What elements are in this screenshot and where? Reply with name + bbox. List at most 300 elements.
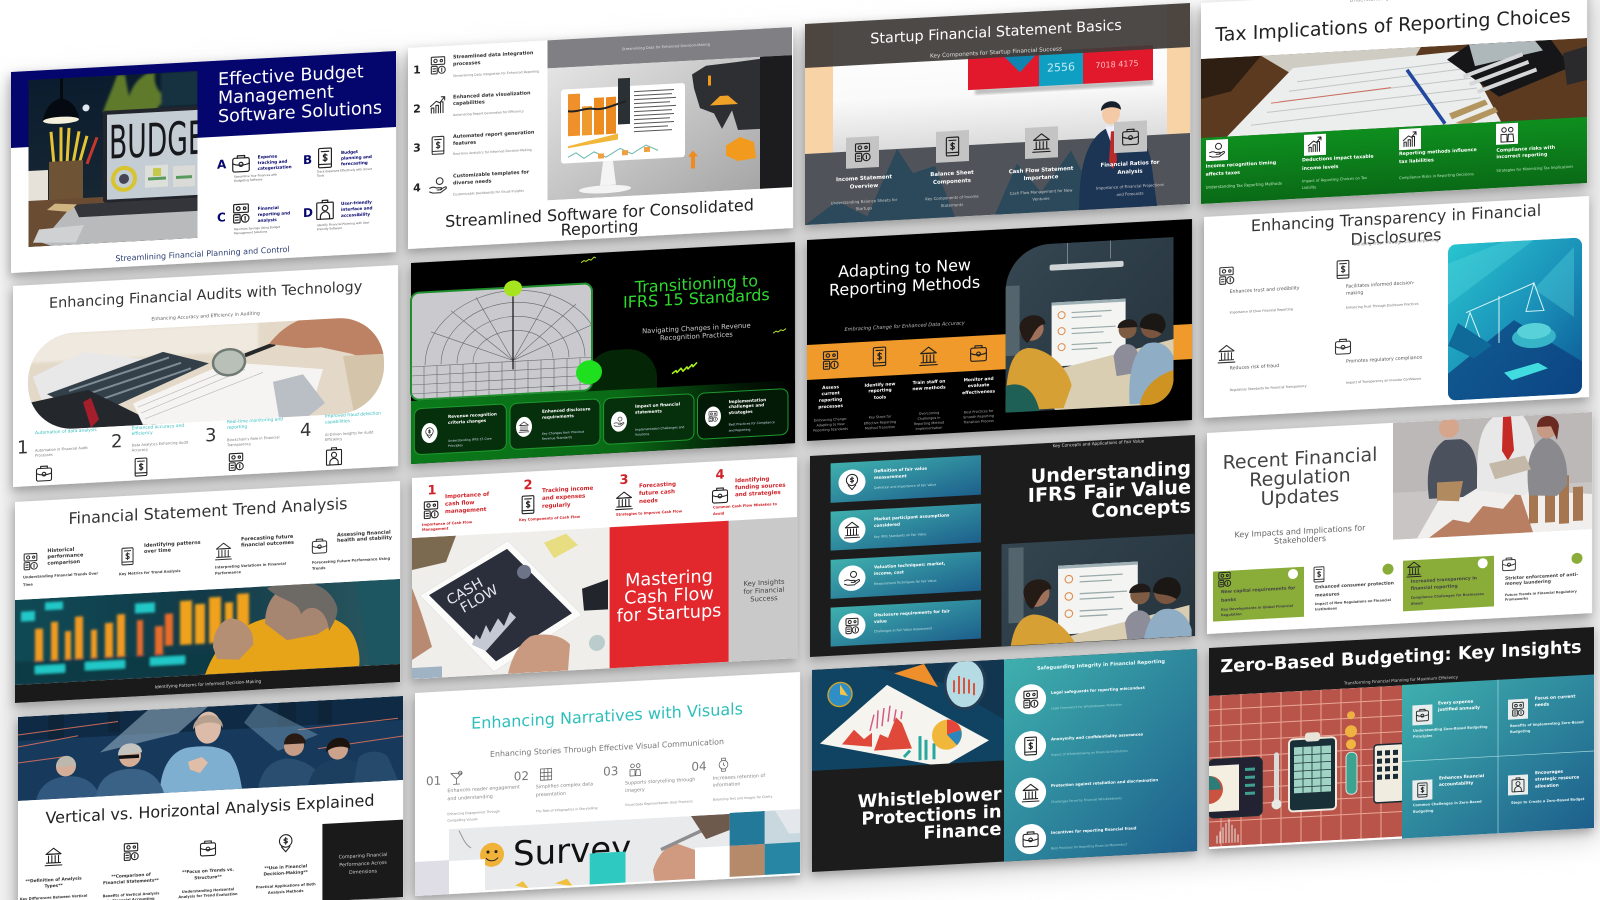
dark side panel: Comparing Financial — [339, 852, 387, 861]
green panel 4: Strategies for Minimizing Tax Implications — [1496, 165, 1573, 173]
red title panel: Mastering — [625, 567, 713, 591]
column 3: future cash — [639, 489, 675, 497]
card 4: Future Trends in Financial Regulatory — [1505, 589, 1578, 597]
box 4 — [698, 388, 788, 439]
title — [218, 61, 382, 127]
point 04: Increases retention of — [713, 773, 765, 782]
point 3: Reduces risk of fraud — [1230, 363, 1279, 372]
box 1: measurement — [874, 473, 907, 480]
column 4: Analysis Methods — [268, 889, 303, 895]
green panel 2: Liability — [1302, 185, 1317, 190]
column 2: Key Components of Cash Flow — [519, 515, 581, 522]
item A: expense tracking: Expense — [258, 153, 277, 160]
step 3: 3 — [205, 425, 216, 447]
photo: tablet reading cash flow: FLOW — [458, 582, 501, 617]
box 2: Key IFRS Standards on Fair Value — [874, 532, 926, 539]
point 04: Balancing Text and Images for Clarity — [713, 795, 772, 802]
column 2 — [519, 475, 593, 522]
item: income statement: Startups — [856, 205, 872, 211]
column 3: Interpreting Variations in Financial — [215, 562, 286, 570]
insight 3: accountability — [1439, 780, 1474, 788]
list item 3: Real-time Analytics for Informed Decision-Making — [453, 148, 532, 156]
item: balance sheet — [925, 130, 979, 209]
column 3 — [616, 470, 683, 517]
green panel 2: Deductions impact taxable — [1302, 154, 1374, 163]
box 2: Revenue Standards — [542, 435, 573, 441]
point 04: 04 — [691, 759, 707, 774]
card 2: measures — [1315, 591, 1340, 599]
green panel 1: Understanding Tax Reporting Methods — [1206, 181, 1282, 190]
column: assess — [813, 351, 848, 433]
photo: tablet reading cash flow — [412, 527, 610, 679]
footer band — [15, 664, 400, 703]
point 4 — [1336, 335, 1422, 385]
red title panel — [610, 521, 729, 668]
footer band: Identifying Patterns for Informed Decision-Making — [155, 679, 262, 690]
column 4: **Use in Financial — [264, 863, 308, 872]
list item 4: Customizable templates for — [453, 169, 530, 180]
column: monitor: evaluate — [968, 382, 989, 389]
slide: Transitioning to IFRS 15 Standards — [411, 242, 795, 464]
column 4: Practical Applications of Both — [256, 882, 316, 890]
title: Zero-Based Budgeting: Key Insights — [1220, 637, 1582, 677]
grey side label: Key Insights — [743, 578, 785, 588]
point 1: Importance of Clear Financial Reporting — [1230, 307, 1293, 315]
box 4: Disclosure requirements for fair — [874, 608, 951, 618]
card 3: Compliance Challenges for Businesses — [1411, 592, 1484, 600]
column 2 — [119, 540, 201, 576]
step 2 — [111, 422, 189, 477]
title — [1028, 456, 1191, 526]
item: financial ratios: and Forecasts — [1116, 191, 1144, 197]
slide: Whistleblower Protections in Finance — [812, 646, 1197, 872]
insight 3: Common Challenges in Zero-Based — [1413, 800, 1482, 807]
item B: budget planning: Budget — [341, 149, 358, 155]
photo: business team and chart — [1393, 410, 1592, 540]
subtitle: Enhancing Stories Through Effective Visual Communication — [490, 737, 724, 759]
green panel 1: affects taxes — [1206, 170, 1240, 178]
card 1: New capital requirements for — [1221, 585, 1296, 595]
slide: Enhancing Financial Audits with Technology — [13, 265, 398, 487]
safeguard 4: Incentives for reporting financial fraud — [1051, 825, 1137, 835]
list item 2: 2 — [413, 102, 421, 116]
footer subtitle: Streamlining Financial Planning and Control — [115, 245, 290, 263]
column 2: Tracking income — [542, 486, 593, 494]
item A: expense tracking: A — [217, 157, 227, 172]
item D: user-friendly interface: accessibility — [341, 211, 370, 218]
item B: budget planning: forecasting — [341, 160, 368, 166]
dark side panel — [322, 820, 403, 900]
grey side label — [743, 578, 785, 604]
green panel 1: Income recognition timing — [1206, 160, 1276, 170]
title: Management — [218, 82, 334, 109]
green panel 2 — [1297, 127, 1394, 199]
column: train — [912, 346, 946, 431]
column: train: Implementation — [916, 426, 942, 431]
title band — [805, 3, 1190, 68]
card 3 — [1403, 556, 1494, 611]
green panel 4: Compliance risks with — [1496, 145, 1556, 154]
insight 2: Budgeting — [1510, 729, 1531, 734]
subtitle: Transforming Financial Planning for Maximum Efficiency — [1343, 674, 1459, 686]
illustration: red grid with budget tools — [1209, 685, 1404, 847]
panel heading: Safeguarding Integrity in Financial Reporting — [1037, 659, 1165, 672]
column: identify: Method Transition — [865, 425, 895, 431]
teal mountain shapes — [805, 138, 1101, 225]
column 4: Trends — [312, 566, 326, 571]
box 4 — [831, 599, 981, 647]
photo: analyst viewing glowing charts — [15, 576, 400, 685]
item D: user-friendly interface: Identify Financial Planning with User- — [317, 220, 370, 227]
grey side label: Success — [750, 594, 778, 604]
box 2: Key Changes from Previous — [542, 430, 585, 436]
column: identify: Key Steps for — [869, 414, 892, 420]
box 3: income, cost — [874, 569, 904, 576]
point 03: imagery — [625, 787, 645, 794]
insight 4: strategic resource — [1535, 774, 1579, 783]
item: cash flow statement: Importance — [1024, 174, 1059, 182]
list item 4: 4 — [413, 181, 421, 195]
green panel 1 — [1201, 133, 1297, 204]
column 3 — [215, 534, 294, 576]
subtitle: Embracing Change for Enhanced Data Accuracy — [844, 320, 966, 333]
step 1: Automation in Financial Audit — [35, 446, 88, 453]
step 1: 1 — [17, 437, 28, 459]
box 2: requirements — [542, 413, 574, 420]
title: IFRS 15 Standards — [623, 285, 770, 312]
grey side label: for Financial — [743, 586, 785, 596]
box 4: Best Practices for Compliance — [729, 420, 775, 427]
box 3 — [831, 552, 981, 599]
box 2: Market participant assumptions — [874, 512, 950, 522]
card 2: Enhanced consumer protection — [1315, 580, 1394, 591]
column: identify: Identify new — [865, 381, 895, 389]
photo: calculator and papers — [1201, 38, 1587, 139]
infographic panel — [968, 45, 1153, 95]
column: monitor: Smooth Reporting — [963, 414, 994, 419]
box 1 — [414, 404, 506, 455]
list item 2 — [413, 90, 531, 119]
point 01 — [426, 768, 520, 824]
title: IFRS Fair Value — [1028, 475, 1191, 507]
item B: budget planning — [303, 146, 373, 179]
box 4: value — [874, 618, 887, 624]
green panel 3: Reporting methods influence — [1399, 147, 1477, 157]
slide: Recent Financial Regulation Updates — [1207, 410, 1592, 634]
item D: user-friendly interface: Friendly Software — [317, 226, 342, 231]
box 1: Understanding IFRS 15 Core — [448, 437, 492, 443]
point 3: Regulatory Standards for Financial Transparency — [1230, 384, 1307, 392]
green panel 2: Impact of Reporting Choices on Tax — [1302, 176, 1368, 183]
title: Tax Implications of Reporting Choices — [1214, 5, 1571, 46]
slide: Effective Budget Management Software Solutions — [11, 51, 396, 273]
subtitle: Stakeholders — [1274, 534, 1326, 546]
protractor grid image — [411, 283, 601, 400]
column 2 — [103, 842, 160, 900]
list item 2: Enhanced data visualization — [453, 90, 531, 101]
insight 2: Benefits of Implementing Zero-Based — [1510, 720, 1584, 728]
column 4: funding sources — [735, 483, 786, 491]
image: blue scales of justice — [1448, 237, 1582, 401]
list item 4: diverse needs — [453, 178, 492, 187]
item A: expense tracking: tracking and — [258, 159, 287, 165]
step 2: Enhanced accuracy and — [132, 423, 184, 432]
title: Whistleblower — [858, 784, 1002, 813]
item B: budget planning: planning and — [341, 154, 372, 161]
card 4: Stricter enforcement of anti- — [1505, 572, 1578, 582]
green panel 2: income levels — [1302, 164, 1339, 172]
item B: budget planning: Tools — [316, 173, 325, 178]
column 2: Benefits of Vertical Analysis — [103, 891, 159, 898]
box 4: Implementation — [729, 397, 766, 404]
item: cash flow statement — [1009, 125, 1074, 203]
box 4: strategies — [729, 409, 753, 415]
point 4: Impact of Transparency on Investor Confidence — [1346, 377, 1421, 385]
column: identify — [864, 346, 896, 431]
column 3: Analysis for Trend Evaluation — [178, 892, 238, 899]
box 2 — [510, 399, 600, 450]
column: monitor — [962, 345, 995, 425]
column 1: Importance of Cash Flow — [422, 520, 473, 527]
column: train: Challenges in — [918, 416, 940, 421]
insight 1: Understanding Zero-Based Budgeting — [1413, 725, 1488, 733]
column 4 — [256, 833, 316, 896]
safeguard 1: Legal safeguards for reporting misconduct — [1051, 685, 1145, 695]
step 4: 4 — [300, 420, 311, 441]
slide: Streamlined Software for Consolidated Reporting — [408, 27, 793, 249]
column 3: financial outcomes — [241, 540, 294, 549]
squiggles — [581, 247, 786, 379]
item: financial ratios — [1096, 119, 1164, 198]
title: Enhancing Financial Audits with Technology — [49, 279, 363, 312]
slide: Vertical vs. Horizontal Analysis Explained — [18, 696, 403, 900]
step 2: Accuracy — [132, 448, 149, 453]
step 3 — [205, 416, 283, 472]
photo: meeting room — [1006, 237, 1174, 413]
column 3: Structure** — [194, 874, 222, 881]
subtitle: Enhancing Accuracy and Efficiency in Auditing — [151, 311, 260, 322]
slide: Startup Financial Statement Basics — [805, 3, 1190, 225]
safeguard 3: Challenges Faced by Financial Whistleblowers — [1051, 796, 1122, 804]
insight 1: justified annually — [1437, 705, 1480, 713]
column 3: needs — [639, 498, 659, 505]
insight 2 — [1508, 693, 1584, 734]
item: financial ratios: Importance of Financial Projections — [1096, 182, 1164, 191]
item D: user-friendly interface — [303, 198, 373, 232]
column: identify: tools — [874, 394, 886, 401]
item: income statement: Overview — [850, 183, 878, 191]
insight 3: Enhances financial — [1439, 773, 1485, 781]
item: cash flow statement: Cash Flow Management for New — [1010, 187, 1073, 196]
title — [829, 255, 980, 300]
title: Regulation — [1249, 464, 1351, 492]
card 1: Key Developments in Global Financial — [1221, 604, 1293, 612]
photo: survey on paper — [449, 814, 730, 894]
column 3 — [178, 839, 238, 899]
point 02: presentation — [536, 791, 566, 798]
green panel 3: tax liabilities — [1399, 157, 1434, 165]
point 01: Enhancing Engagement Through — [447, 809, 500, 816]
column 1: management — [445, 507, 487, 515]
box 1: Principles — [448, 443, 463, 448]
column 4: Assessing financial — [337, 530, 391, 538]
point 01: 01 — [426, 774, 441, 788]
list item 3: 3 — [413, 141, 421, 155]
column 3: Understanding Horizontal — [182, 887, 234, 894]
column 4: Common Cash Flow Mistakes to — [713, 502, 777, 510]
column 3: Strategies to Improve Cash Flow — [616, 509, 683, 517]
column 1: cash flow — [445, 500, 474, 508]
item A: expense tracking: Budgeting Software — [234, 177, 263, 183]
point 3 — [1218, 341, 1307, 393]
title: Reporting — [561, 216, 638, 240]
point 01: and understanding — [447, 794, 493, 802]
column 2: 2 — [523, 478, 533, 493]
point 03: Supports storytelling through — [625, 777, 695, 787]
item: financial ratios: Financial Ratios for — [1101, 160, 1160, 169]
point 2: Enhancing Trust Through Disclosure Practices — [1346, 302, 1419, 310]
safeguard 4: Best Practices for Reporting Financial Misconduct — [1051, 842, 1128, 850]
card 2 — [1314, 563, 1394, 612]
step 2: 2 — [111, 431, 122, 453]
step 4 — [300, 410, 381, 467]
title: Transitioning to — [634, 271, 758, 297]
column: monitor: Transition Process — [962, 419, 994, 425]
title: Recent Financial — [1223, 444, 1377, 474]
item: income statement: Understanding Balance Sheets for — [831, 197, 898, 206]
step 1: Automation of data analysis — [35, 427, 97, 436]
item C: financial reporting: C — [217, 210, 226, 225]
box 1: Definition and Importance of Fair Value — [874, 483, 936, 490]
point 01: Enhances reader engagement — [447, 784, 520, 794]
point 03: 03 — [603, 764, 618, 779]
point 01: Compelling Visuals — [447, 817, 478, 823]
slide: Understanding IFRS Fair Value Concepts — [804, 434, 1199, 666]
point 02: The Role of Infographics in Storytelling — [535, 806, 597, 813]
column 4: 4 — [715, 467, 725, 483]
infographic panel: 2556 — [1047, 60, 1075, 75]
photo: tablet reading cash flow: CASH — [444, 575, 486, 609]
title: Enhancing Narratives with Visuals — [471, 699, 743, 733]
subtitle: Navigating Changes in Revenue — [642, 321, 751, 335]
band subtitle: Streamlining Data for Enhanced Decision-Making — [622, 43, 710, 51]
step 1 — [17, 427, 97, 482]
red title panel: Cash Flow — [624, 584, 714, 609]
title — [1223, 444, 1377, 512]
column 1: Importance of — [445, 492, 490, 500]
red title panel: for Startups — [617, 601, 721, 627]
illustration: monitor and map — [547, 57, 761, 200]
slide: Enhancing Narratives with Visuals — [415, 672, 800, 896]
item C: financial reporting: Financial — [258, 205, 279, 211]
title: Software Solutions — [218, 98, 382, 127]
photo: survey on paper: Survey — [513, 828, 631, 875]
box 3: Measurement Techniques for Fair Value — [874, 579, 936, 586]
title: Disclosures — [1351, 225, 1441, 249]
item A: expense tracking: categorization — [258, 164, 292, 171]
list item 4 — [413, 169, 530, 199]
column: assess: Assess — [822, 384, 839, 391]
column 2: over time — [144, 547, 172, 555]
item A: expense tracking — [217, 153, 292, 184]
column 1 — [20, 846, 87, 900]
list item 1: Streamlining Data Integration for Enhanced Reporting — [453, 69, 539, 78]
safeguard 4 — [1015, 818, 1137, 855]
card 3: Increased transparency in — [1411, 575, 1477, 585]
list item 1 — [413, 50, 539, 80]
column 1: **Definition of Analysis — [26, 876, 82, 885]
item C: financial reporting: Management Solutions — [234, 230, 268, 235]
slide: Zero-Based Budgeting: Key Insights — [1209, 627, 1594, 849]
column: monitor: Best Practices for — [964, 409, 994, 414]
illustration: report with charts — [812, 657, 1004, 774]
insight 1: Principles — [1413, 734, 1432, 739]
safeguard 2 — [1015, 725, 1144, 762]
list item 1: processes — [453, 60, 481, 68]
infographic panel: 7018 4175 — [1095, 59, 1139, 70]
card 4: money laundering — [1505, 579, 1551, 587]
safeguard 2: Anonymity and confidentiality assurances — [1051, 731, 1144, 741]
list item 2: capabilities — [453, 99, 485, 107]
title: Concepts — [1091, 494, 1191, 523]
title: Finance — [923, 819, 1001, 844]
box 1: Revenue recognition — [448, 411, 497, 419]
column 4: Identifying — [735, 477, 769, 484]
list item 3: Automated report generation — [453, 130, 535, 140]
safeguard 2: Impact of Whistleblowing on Financial Institutions — [1051, 749, 1128, 757]
card 3: Ahead — [1411, 601, 1423, 606]
title: Financial Statement Trend Analysis — [68, 494, 348, 528]
column 3: 3 — [619, 473, 629, 488]
colour squares — [415, 845, 730, 896]
item C: financial reporting — [217, 202, 290, 236]
card 3: financial reporting — [1411, 583, 1458, 592]
card 1 — [1213, 567, 1304, 622]
item B: budget planning: B — [303, 153, 312, 167]
top subtitle: Key Concepts and Applications of Fair Value — [1053, 438, 1145, 448]
green panel 3 — [1394, 122, 1490, 193]
photo: magnifier over paperwork — [28, 311, 385, 431]
title band: Startup Financial Statement Basics — [870, 18, 1122, 47]
point 03 — [603, 760, 695, 808]
box 4: and Reporting — [729, 428, 750, 433]
slide: Mastering Cash Flow for Startups — [412, 457, 797, 679]
column: monitor: Monitor and — [964, 376, 994, 383]
dark side panel: Performance Across — [339, 860, 387, 868]
box 4: Challenges in Fair Value Assessment — [874, 626, 933, 634]
green panel 4: incorrect reporting — [1496, 152, 1547, 160]
teal insights grid — [1402, 675, 1594, 838]
column 2: regularly — [542, 502, 571, 510]
step 4: AI-Driven Insights for Audit — [325, 430, 374, 437]
step 3: Transparency — [226, 442, 252, 447]
column 1: Historical — [47, 547, 75, 554]
column: train: Overcoming — [919, 411, 939, 416]
item B: budget planning: Track Expenses Effectively with Smart — [316, 167, 373, 174]
title: Updates — [1261, 484, 1339, 510]
slide: Tax Implications of Reporting Choices — [1201, 0, 1587, 204]
item C: financial reporting: reporting and — [258, 210, 290, 217]
column 3: Forecasting — [639, 482, 676, 490]
column 4: and strategies — [735, 490, 781, 498]
column 1: Management — [422, 527, 449, 532]
photo: meeting room — [1002, 534, 1194, 646]
box 1 — [831, 455, 981, 503]
box 3: statements — [635, 408, 662, 415]
column 1: comparison — [47, 559, 81, 567]
item D: user-friendly interface: User-friendly — [341, 199, 372, 206]
safeguard 1: Legal Framework for Whistleblower Protection — [1051, 703, 1122, 710]
